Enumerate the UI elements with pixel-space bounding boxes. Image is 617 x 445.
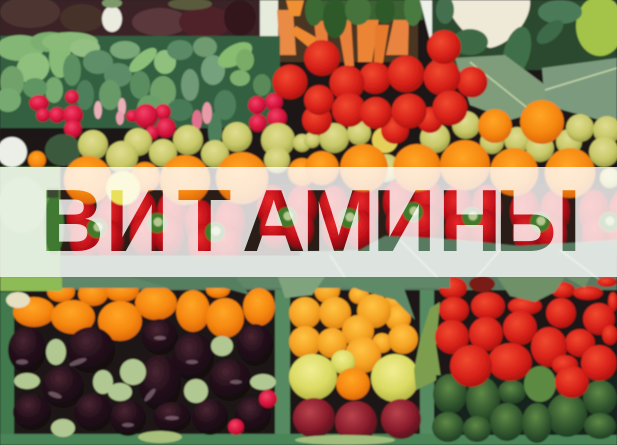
title: photo-filled word: ВИТАМИНЫ [40, 171, 581, 270]
pears row [78, 111, 617, 188]
cucumbers [432, 366, 617, 443]
green leafy backdrop and cauliflower [432, 0, 617, 80]
cabbage leaves [455, 55, 617, 120]
yellow apples and orange fruit [289, 350, 419, 402]
white ball and dark leaf [0, 134, 81, 169]
eggplant caps and small radishes [14, 336, 277, 443]
pale leaf under plums [295, 435, 395, 445]
oranges row [64, 100, 595, 205]
tomato cluster [272, 30, 488, 144]
crinkled green leaf [414, 302, 441, 390]
cabbage leaves under peppers [60, 236, 617, 290]
oranges, lower left crate [13, 280, 275, 341]
peaches, middle crate [289, 277, 418, 373]
radish greens [0, 32, 280, 148]
eggplants [8, 319, 273, 436]
red plums [293, 398, 421, 443]
tomatoes, lower right crate [435, 276, 617, 398]
dark red lettuce, top left [0, 0, 262, 44]
eggplant highlights [16, 336, 242, 427]
red bell peppers [60, 180, 617, 264]
leek [260, 0, 279, 46]
lettuce under banner [0, 167, 64, 279]
radishes [29, 90, 287, 140]
crate frame [0, 290, 617, 445]
carrots and carrot tops [277, 0, 440, 66]
translucent white banner [0, 167, 617, 277]
top leaf strip of lower crates [0, 277, 590, 320]
